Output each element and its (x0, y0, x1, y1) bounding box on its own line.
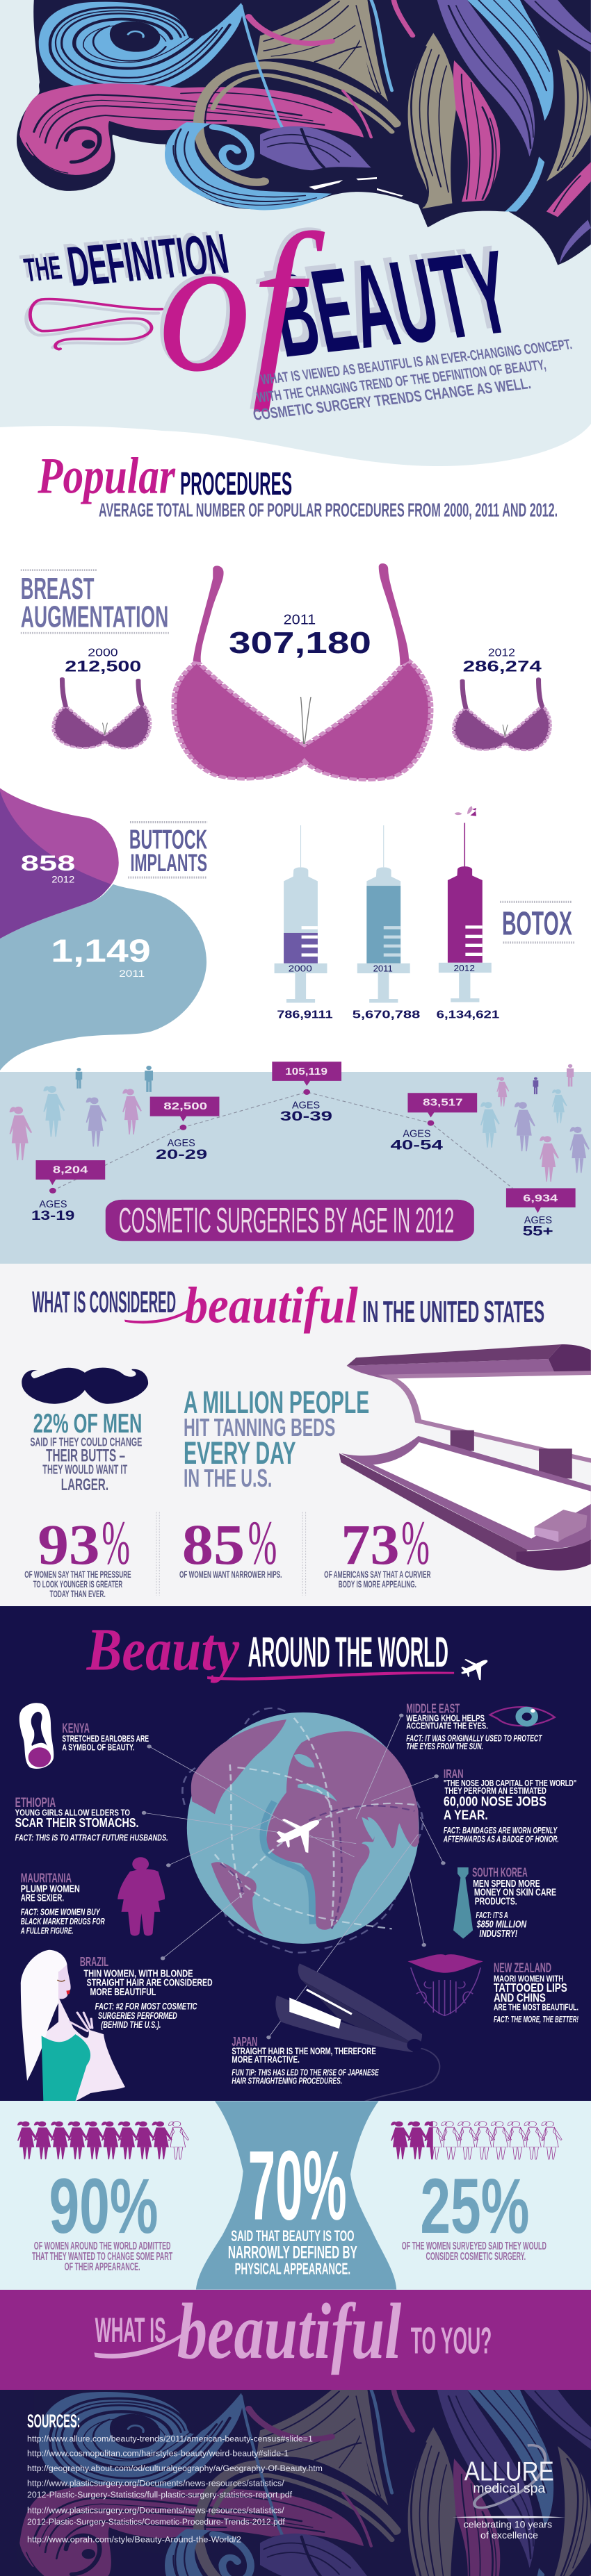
stat: a million people: EVERY DAY (184, 1435, 296, 1471)
text: japan: MORE ATTRACTIVE. (232, 2055, 300, 2065)
chart: buttock implants blobs: 2012 (51, 875, 74, 885)
section: united states: 22% OF MEN (33, 1408, 142, 1439)
chart: syringe 2000 (275, 825, 333, 1021)
hero: hair illustration (17, 0, 591, 265)
text: brazil: BRAZIL (80, 1955, 108, 1969)
section: closing stats and footer: PHYSICAL APPEARANCE. (235, 2261, 350, 2278)
chart point: ages 40-54 (391, 1093, 477, 1153)
text: kenya: STRETCHED EARLOBES ARE (62, 1734, 149, 1744)
section: united states: THEIR BUTTS – (46, 1446, 125, 1465)
sources: http://www.plasticsurgery.org/Documents/news-resources/statistics/ (27, 2506, 284, 2515)
chart: syringe 2011: 5,670,788 (353, 1008, 421, 1021)
section: buttock, botox, age: BUTTOCK (129, 824, 207, 855)
shape: hourglass (196, 2101, 396, 2290)
section: beauty around the world (15, 1616, 578, 2102)
icon: tie (453, 1867, 473, 1939)
icon: tattooed lips (407, 1954, 483, 2015)
stat: 90 percent: THAT THEY WANTED TO CHANGE SOME PART (32, 2250, 172, 2263)
icon: plane on globe (276, 1819, 319, 1853)
sources: SOURCES: (27, 2411, 80, 2431)
text: south korea: $850 MILLION (476, 1918, 527, 1930)
logo: allure medical spa: ALLURE (464, 2457, 554, 2487)
section: united states: HIT TANNING BEDS (184, 1414, 335, 1442)
chart: syringe 2012 (437, 806, 500, 1021)
sources: 2012-Plastic-Surgery-Statistics/full-plastic-surgery-statistics-report.pdf (27, 2490, 292, 2499)
text: japan: STRAIGHT HAIR IS THE NORM, THEREFORE (232, 2047, 376, 2057)
text: south korea: SOUTH KOREA (472, 1865, 528, 1880)
stat: 93 percent: 93 (38, 1513, 100, 1577)
title: The Definition: THE (18, 245, 60, 286)
stat: 73 percent: 73 (341, 1513, 400, 1577)
sources: http://www.cosmopolitan.com/hairstyles-beauty/weird-beauty#slide-1 (27, 2449, 289, 2458)
closing question: beautiful (177, 2287, 401, 2375)
logo: allure medical spa: medical spa (473, 2480, 546, 2496)
section: popular procedures: AUGMENTATION (21, 600, 168, 634)
text: japan: JAPAN (232, 2035, 257, 2049)
text: japan: HAIR STRAIGHTENING PROCEDURES. (232, 2076, 342, 2086)
section: popular procedures: PROCEDURES (180, 466, 292, 502)
stat: 90 percent: OF THEIR APPEARANCE. (65, 2261, 140, 2272)
logo: allure medical spa (452, 2445, 565, 2541)
illustration: globe (182, 1708, 423, 1953)
chart point: ages 55+: 6,934 (523, 1192, 558, 1204)
text: south korea: FACT: IT'S A (476, 1910, 508, 1920)
sources: http://www.oprah.com/style/Beauty-Around-the-World/2 (27, 2535, 241, 2544)
sources: http://www.allure.com/beauty-trends/2011/american-beauty-census#slide=1 (27, 2434, 313, 2443)
title: of (26, 190, 327, 413)
chart: bra 2012 (453, 647, 550, 750)
background: hero wave (0, 0, 591, 466)
text: south korea: MEN SPEND MORE (473, 1879, 540, 1890)
title: The Definition (18, 219, 233, 298)
stat: 22 percent of men (30, 1408, 142, 1494)
text: middle east (406, 1701, 542, 1751)
chart: bra 2011: 2011 (284, 611, 316, 627)
section: united states: BODY IS MORE APPEALING. (339, 1578, 416, 1590)
chart point: ages 20-29: 20-29 (156, 1146, 207, 1162)
section: popular procedures (21, 447, 558, 779)
chart point: ages 13-19 (31, 1160, 105, 1223)
text: mauritania: PLUMP WOMEN (21, 1883, 80, 1894)
icon: plump woman (118, 1857, 165, 1935)
logo: allure medical spa: celebrating 10 years (464, 2520, 552, 2530)
chart point: ages 13-19: 13-19 (31, 1207, 74, 1223)
chart point: ages 30-39: AGES (292, 1099, 320, 1111)
text: new zealand: AND CHINS (494, 1991, 546, 2005)
hero title block: DEFINITION (63, 222, 233, 298)
text: middle east: WEARING KHOL HELPS (406, 1713, 485, 1723)
chart point: ages 55+: 55+ (523, 1223, 553, 1239)
text: ethiopia (15, 1794, 168, 1842)
heading: what is considered beautiful (32, 1276, 544, 1334)
text: brazil: SURGERIES PERFORMED (98, 2011, 177, 2021)
chart: bra 2011 (174, 563, 431, 779)
logo: allure medical spa: of excellence (480, 2530, 538, 2541)
section: united states: % (102, 1509, 130, 1578)
icon: eye (490, 1707, 555, 1726)
title: The Definition: THE (22, 249, 64, 289)
sources (27, 2411, 323, 2544)
text: mauritania: FACT: SOME WOMEN BUY (21, 1907, 101, 1917)
title: of: of (154, 190, 323, 410)
chart point: ages 30-39: 105,119 (285, 1065, 327, 1078)
closing question: WHAT IS (95, 2311, 165, 2350)
sources: http://geography.about.com/od/culturalgeography/a/Geography-Of-Beauty.htm (27, 2463, 323, 2473)
heading: breast augmentation: BREAST (21, 572, 95, 606)
section: united states: OF WOMEN SAY THAT THE PRESSURE (24, 1569, 131, 1580)
background: united states section (0, 1264, 591, 1606)
background: world section (0, 1606, 591, 2101)
text: mauritania (20, 1871, 105, 1935)
icon: small plane (461, 1659, 487, 1680)
chart point: ages 40-54: 83,517 (423, 1096, 463, 1108)
chart: bra 2012: 286,274 (463, 658, 542, 675)
chart: syringe 2000: 2000 (289, 964, 312, 973)
text: brazil: STRAIGHT HAIR ARE CONSIDERED (87, 1977, 213, 1988)
title: Beauty (254, 221, 521, 382)
text: iran (443, 1767, 576, 1844)
heading: buttock implants (129, 824, 207, 877)
connector lines (142, 1714, 446, 2039)
chart point: ages 13-19: 8,204 (53, 1164, 88, 1175)
text: south korea: INDUSTRY! (479, 1928, 517, 1940)
text: brazil: MORE BEAUTIFUL (90, 1986, 156, 1998)
text: ethiopia: SCAR THEIR STOMACHS. (15, 1816, 138, 1830)
text: brazil: (BEHIND THE U.S.). (101, 2020, 161, 2031)
section: united states (22, 1276, 591, 1599)
chart: bra 2000: 2000 (88, 647, 118, 659)
illustration: hair straightener (275, 1963, 439, 2102)
text: middle east: THE EYES FROM THE SUN. (406, 1741, 483, 1751)
illustration: blonde woman (21, 1950, 125, 2102)
section: united states: OF WOMEN WANT NARROWER HIPS. (179, 1569, 282, 1580)
text: japan (232, 2035, 379, 2086)
section: united states: % (401, 1509, 430, 1578)
text: brazil: FACT: #2 FOR MOST COSMETIC (95, 2002, 197, 2012)
section: closing stats and footer (17, 2101, 565, 2544)
chart: syringe 2011: 2011 (373, 964, 393, 973)
text: ethiopia: YOUNG GIRLS ALLOW ELDERS TO (15, 1808, 130, 1817)
text: mauritania: ARE SEXIER. (21, 1892, 64, 1904)
heading: Popular Procedures: Popular (38, 447, 176, 504)
hero title block: DEFINITION (60, 219, 229, 295)
sources: 2012-Plastic-Surgery-Statistics/Cosmetic-Procedure-Trends-2012.pdf (27, 2517, 285, 2527)
section: closing stats and footer: 70% (248, 2130, 347, 2240)
chart point: ages 55+ (506, 1188, 576, 1239)
stat: 73 percent (324, 1509, 431, 1590)
heading: what is considered beautiful: beautiful (185, 1276, 358, 1334)
stat: 93 percent (24, 1509, 131, 1599)
chart: bra 2000: 212,500 (65, 658, 141, 675)
heading: beauty around the world: Beauty (86, 1616, 240, 1683)
text: iran: A YEAR. (444, 1807, 488, 1822)
text: south korea (472, 1865, 556, 1940)
section: buttock, botox, age (0, 788, 590, 1241)
background: footer hair (0, 2390, 591, 2576)
chart: buttock implants blobs: 2011 (119, 968, 145, 979)
stat: 90 percent: 90% (49, 2163, 159, 2249)
text: mauritania: MAURITANIA (21, 1871, 72, 1885)
figures: crowd (10, 1064, 590, 1182)
stat: a million people: IN THE U.S. (184, 1464, 272, 1492)
chart: syringe 2012: 6,134,621 (437, 1008, 500, 1021)
text: ethiopia: ETHIOPIA (15, 1794, 56, 1810)
text: ethiopia: FACT: THIS IS TO ATTRACT FUTURE HUSBANDS. (15, 1833, 168, 1842)
text: iran: IRAN (444, 1767, 464, 1781)
stat: 22 percent of men: LARGER. (61, 1476, 108, 1494)
text: mauritania: BLACK MARKET DRUGS FOR (21, 1916, 105, 1926)
chart point: ages 13-19: AGES (39, 1198, 67, 1210)
text: middle east: MIDDLE EAST (406, 1701, 460, 1716)
section: united states: % (248, 1509, 277, 1578)
text: middle east: ACCENTUATE THE EYES. (406, 1721, 488, 1731)
illustration: tanning bed (339, 1344, 591, 1571)
icon: stretched ear (19, 1703, 54, 1769)
stat: 70 percent: NARROWLY DEFINED BY (228, 2243, 357, 2262)
chart point: ages 40-54: 40-54 (391, 1137, 444, 1153)
chart point: ages 55+: AGES (524, 1214, 552, 1225)
heading: buttock implants: IMPLANTS (131, 850, 207, 877)
stat: 70 percent (228, 2130, 357, 2278)
chart: bra 2012: 2012 (488, 647, 515, 659)
stat: 85 percent: 85 (182, 1513, 245, 1577)
chart: syringe 2012: 2012 (454, 963, 475, 973)
text: mauritania: A FULLER FIGURE. (20, 1926, 74, 1935)
chart point: ages 30-39 (272, 1062, 341, 1124)
chart point: ages 20-29: 82,500 (163, 1100, 207, 1112)
sources: http://www.plasticsurgery.org/Documents/news-resources/statistics/ (27, 2479, 284, 2488)
text: japan: FUN TIP: THIS HAS LED TO THE RISE OF JAPANESE (232, 2067, 379, 2077)
heading: what is considered beautiful: WHAT IS CONSIDERED (32, 1286, 176, 1319)
text: south korea: PRODUCTS. (475, 1896, 517, 1907)
text: brazil (80, 1955, 213, 2031)
chart: bra 2000 (54, 647, 150, 748)
chart point: ages 40-54: AGES (403, 1128, 431, 1139)
text: new zealand (494, 1960, 578, 2024)
chart point: ages 20-29 (150, 1097, 219, 1162)
heading: breast augmentation (21, 572, 168, 634)
chart point: ages 20-29: AGES (168, 1137, 195, 1149)
title: of: of (159, 193, 327, 413)
stat: 90 percent (17, 2122, 189, 2272)
stat: a million people (184, 1385, 369, 1492)
section: united states: THEY WOULD WANT IT (42, 1463, 127, 1477)
text: kenya (62, 1720, 149, 1752)
stat: 70 percent: SAID THAT BEAUTY IS TOO (231, 2229, 354, 2245)
heading: beauty around the world (86, 1616, 454, 1683)
text: iran: 60,000 NOSE JOBS (444, 1794, 547, 1809)
chart: syringe 2000: 786,9111 (277, 1008, 333, 1021)
chart: syringe 2011 (353, 825, 421, 1021)
icon: mustache (22, 1368, 148, 1404)
background: purple band (0, 2290, 591, 2391)
text: kenya: A SYMBOL OF BEAUTY. (62, 1742, 134, 1752)
stat: 93 percent: TODAY THAN EVER. (50, 1589, 106, 1599)
text: brazil: THIN WOMEN, WITH BLONDE (83, 1968, 193, 1979)
background: stats section (0, 2101, 591, 2290)
chart: buttock implants blobs: 1,149 (51, 932, 151, 968)
chart: buttock implants blobs: 858 (21, 852, 75, 875)
chart: bra 2011: 307,180 (229, 625, 371, 660)
section: united states: SAID IF THEY COULD CHANGE (30, 1435, 142, 1448)
chart: buttock implants blobs (0, 788, 207, 1071)
hero title block (18, 190, 574, 424)
stat: 25 percent (391, 2122, 562, 2263)
chart point: ages 30-39: 30-39 (280, 1108, 332, 1124)
text: kenya: KENYA (62, 1720, 90, 1735)
stat: 90 percent: OF WOMEN AROUND THE WORLD ADMITTED (34, 2240, 171, 2252)
background: age band (0, 1072, 591, 1264)
section: united states: TO LOOK YOUNGER IS GREATER (33, 1578, 122, 1590)
